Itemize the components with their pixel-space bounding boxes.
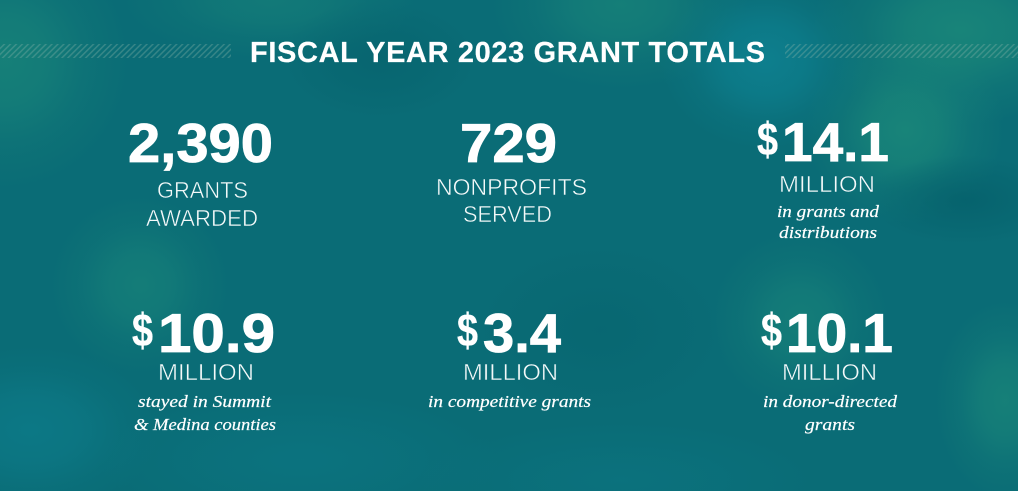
stat: competitive grants — [428, 302, 591, 411]
decorative hatch left — [0, 44, 231, 58]
stat: total grants and distributions: in grants and — [777, 202, 880, 221]
title: FISCAL YEAR 2023 GRANT TOTALS — [250, 37, 765, 69]
stat: grants awarded — [128, 112, 273, 231]
stat: donor-directed grants — [761, 302, 898, 434]
decorative hatch right — [785, 44, 1018, 58]
stat: nonprofits served — [436, 112, 587, 227]
stat: grants awarded: 2,390 — [128, 112, 273, 174]
stat: competitive grants: $ — [457, 304, 478, 356]
stat: total grants and distributions: MILLION — [779, 171, 875, 197]
stat: donor-directed grants: grants — [805, 415, 855, 434]
stat: total grants and distributions: 14.1 — [782, 111, 889, 173]
stat: total grants and distributions: distributions — [779, 223, 877, 242]
stat: competitive grants: in competitive grants — [428, 392, 591, 411]
stat: donor-directed grants: MILLION — [782, 359, 877, 385]
stat: nonprofits served: SERVED — [463, 201, 552, 227]
stat: total grants and distributions — [757, 111, 889, 242]
stat: nonprofits served: NONPROFITS — [436, 174, 587, 200]
stat: stayed in Summit and Medina counties: stayed in Summit — [138, 392, 272, 411]
stat: stayed in Summit and Medina counties: 10.9 — [158, 302, 275, 364]
stat: donor-directed grants: 10.1 — [786, 302, 893, 364]
stat: stayed in Summit and Medina counties — [132, 302, 276, 434]
stat: stayed in Summit and Medina counties: & Medina counties — [134, 415, 276, 434]
stat: competitive grants: 3.4 — [483, 302, 561, 364]
stat: nonprofits served: 729 — [460, 112, 557, 174]
stat: donor-directed grants: $ — [761, 304, 782, 356]
stat: grants awarded: GRANTS — [157, 177, 248, 203]
stat: donor-directed grants: in donor-directed — [763, 392, 898, 411]
stat: grants awarded: AWARDED — [146, 205, 258, 231]
stat: competitive grants: MILLION — [463, 359, 558, 385]
stat: stayed in Summit and Medina counties: $ — [132, 304, 153, 356]
stat: total grants and distributions: $ — [757, 113, 778, 165]
stat: stayed in Summit and Medina counties: MILLION — [158, 359, 254, 385]
